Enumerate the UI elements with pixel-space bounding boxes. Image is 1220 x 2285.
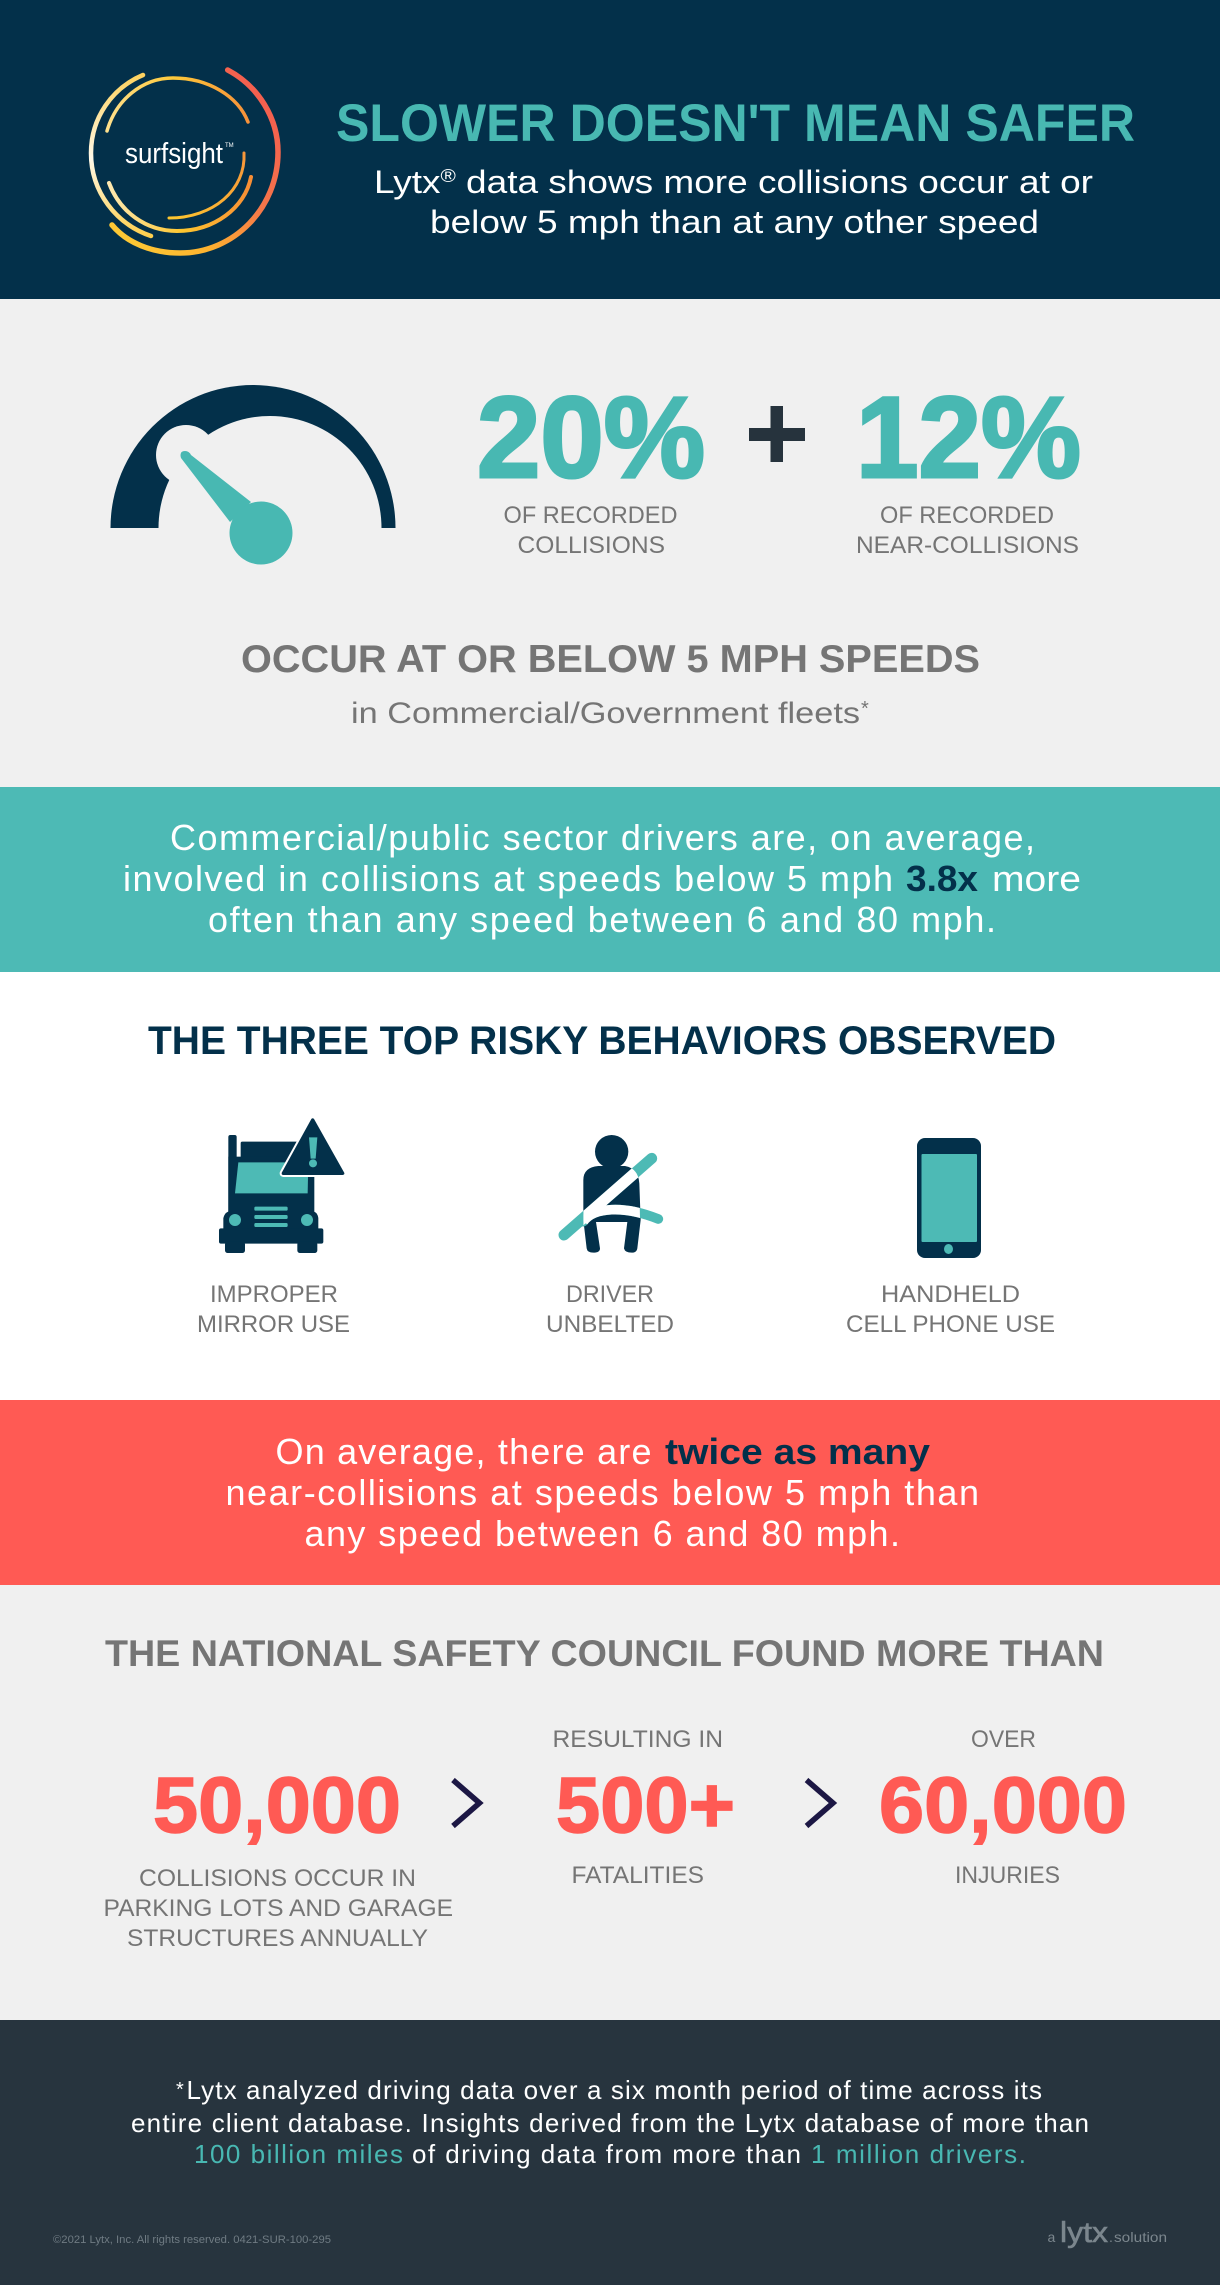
text: methodology note: 1 million drivers. (811, 2139, 1026, 2169)
logo: a lytx solution: a (1048, 2229, 1056, 2245)
label: handheld cell phone use: CELL PHONE USE (846, 1311, 1055, 1338)
heading: three top risky behaviors: THE THREE TOP RISKY BEHAVIORS OBSERVED (148, 1019, 1056, 1063)
label: improper mirror use: MIRROR USE (197, 1311, 350, 1338)
label: improper mirror use (197, 1281, 350, 1338)
panel: teal callout: Commercial/public sector drivers are, on average, (170, 817, 1035, 858)
logo: a lytx solution: lytx (1060, 2217, 1109, 2249)
text: methodology note: Lytx analyzed driving data over a six month period of time across its (186, 2075, 1042, 2105)
stat: 12 percent of recorded near-collisions: 12% (856, 374, 1081, 502)
subtitle: Lytx (374, 164, 432, 200)
text: fleets note: * (861, 698, 869, 720)
title: SLOWER DOESN'T MEAN SAFER (336, 94, 1135, 153)
label: driver unbelted: DRIVER (566, 1281, 654, 1308)
panel: risky behaviors (148, 1026, 1054, 1332)
panel: low speed statistics (0, 299, 1220, 787)
arrow: chevron one (453, 1780, 480, 1826)
panel: red callout: any speed between 6 and 80 mph. (304, 1513, 900, 1554)
panel: footer (0, 2020, 1220, 2285)
panel: header (0, 0, 1220, 299)
stat: 20 percent of recorded collisions: 20% (477, 374, 705, 502)
stat: 50,000 collisions (104, 1760, 453, 1952)
stat: 500+ fatalities (552, 1726, 735, 1889)
icon: speedometer gauge (110, 385, 396, 648)
panel: teal callout: 3.8x (906, 858, 978, 899)
panel: red callout (0, 1400, 1220, 1585)
stat: 50,000 collisions: PARKING LOTS AND GARAGE (104, 1895, 453, 1922)
stat: 20 percent of recorded collisions: OF RECORDED (504, 502, 678, 529)
logo: a lytx solution: . (1109, 2229, 1113, 2245)
text: methodology note: * (176, 2079, 184, 2101)
icon: driver with seatbelt (564, 1135, 658, 1253)
stat: 12 percent of recorded near-collisions: OF RECORDED (880, 502, 1054, 529)
panel: teal callout (0, 787, 1220, 972)
stat: 60,000 injuries: OVER (971, 1726, 1036, 1753)
logo: surfsight ring: surfsight (125, 138, 223, 170)
icon: handheld phone (917, 1138, 981, 1258)
stat: 500+ fatalities: 500+ (556, 1760, 735, 1849)
logo: surfsight ring (91, 70, 278, 253)
label: driver unbelted (546, 1281, 674, 1338)
stat: 500+ fatalities: FATALITIES (572, 1862, 704, 1889)
subtitle: data shows more collisions occur at or (456, 164, 1093, 200)
stat: 50,000 collisions: STRUCTURES ANNUALLY (127, 1925, 428, 1952)
logo: a lytx solution (1048, 2217, 1167, 2249)
stat: 60,000 injuries: INJURIES (955, 1862, 1060, 1889)
label: improper mirror use: IMPROPER (210, 1281, 338, 1308)
panel: red callout: twice as many (665, 1431, 930, 1472)
text: methodology note: of driving data from more than (412, 2139, 801, 2169)
text: fleets note: in Commercial/Government fleets (351, 697, 860, 730)
stat: 60,000 injuries (879, 1726, 1127, 1889)
panel: national safety council (0, 1585, 1220, 2020)
panel: teal callout: involved in collisions at speeds below 5 mph (123, 858, 893, 899)
panel: teal callout: often than any speed between 6 and 80 mph. (208, 899, 996, 940)
logo: surfsight ring: TM (225, 143, 234, 149)
text: methodology note: entire client database. Insights derived from the Lytx database of more than (131, 2108, 1089, 2138)
stat: 50,000 collisions: COLLISIONS OCCUR IN (139, 1865, 416, 1892)
stat: 12 percent of recorded near-collisions (856, 374, 1081, 559)
text: methodology note: 100 billion miles (194, 2139, 403, 2169)
arrow: chevron two (806, 1780, 833, 1826)
panel: teal callout: more (992, 858, 1081, 899)
subtitle: below 5 mph than at any other speed (430, 204, 1039, 240)
stat: 500+ fatalities: RESULTING IN (552, 1726, 723, 1753)
stat: 20 percent of recorded collisions: COLLISIONS (518, 532, 665, 559)
text: methodology note (131, 2075, 1089, 2169)
stat: 20 percent of recorded collisions (477, 374, 705, 559)
heading: occur at or below 5 mph: OCCUR AT OR BELOW 5 MPH SPEEDS (241, 638, 980, 681)
heading: national safety council: THE NATIONAL SAFETY COUNCIL FOUND MORE THAN (105, 1633, 1104, 1674)
stat: 50,000 collisions: 50,000 (153, 1760, 401, 1849)
logo: a lytx solution: solution (1114, 2229, 1167, 2245)
icon: plus sign (749, 406, 805, 462)
stat: 60,000 injuries: 60,000 (879, 1760, 1127, 1849)
stat: 12 percent of recorded near-collisions: NEAR-COLLISIONS (856, 532, 1079, 559)
subtitle (374, 164, 1093, 240)
label: driver unbelted: UNBELTED (546, 1311, 674, 1338)
panel: red callout: On average, there are (276, 1431, 652, 1472)
icon: truck with warning triangle (219, 1120, 343, 1253)
label: handheld cell phone use (846, 1281, 1055, 1338)
label: handheld cell phone use: HANDHELD (881, 1281, 1020, 1308)
panel: red callout: near-collisions at speeds below 5 mph than (226, 1472, 979, 1513)
subtitle: ® (440, 166, 456, 186)
text: copyright: ©2021 Lytx, Inc. All rights reserved. 0421-SUR-100-295 (53, 2234, 331, 2246)
